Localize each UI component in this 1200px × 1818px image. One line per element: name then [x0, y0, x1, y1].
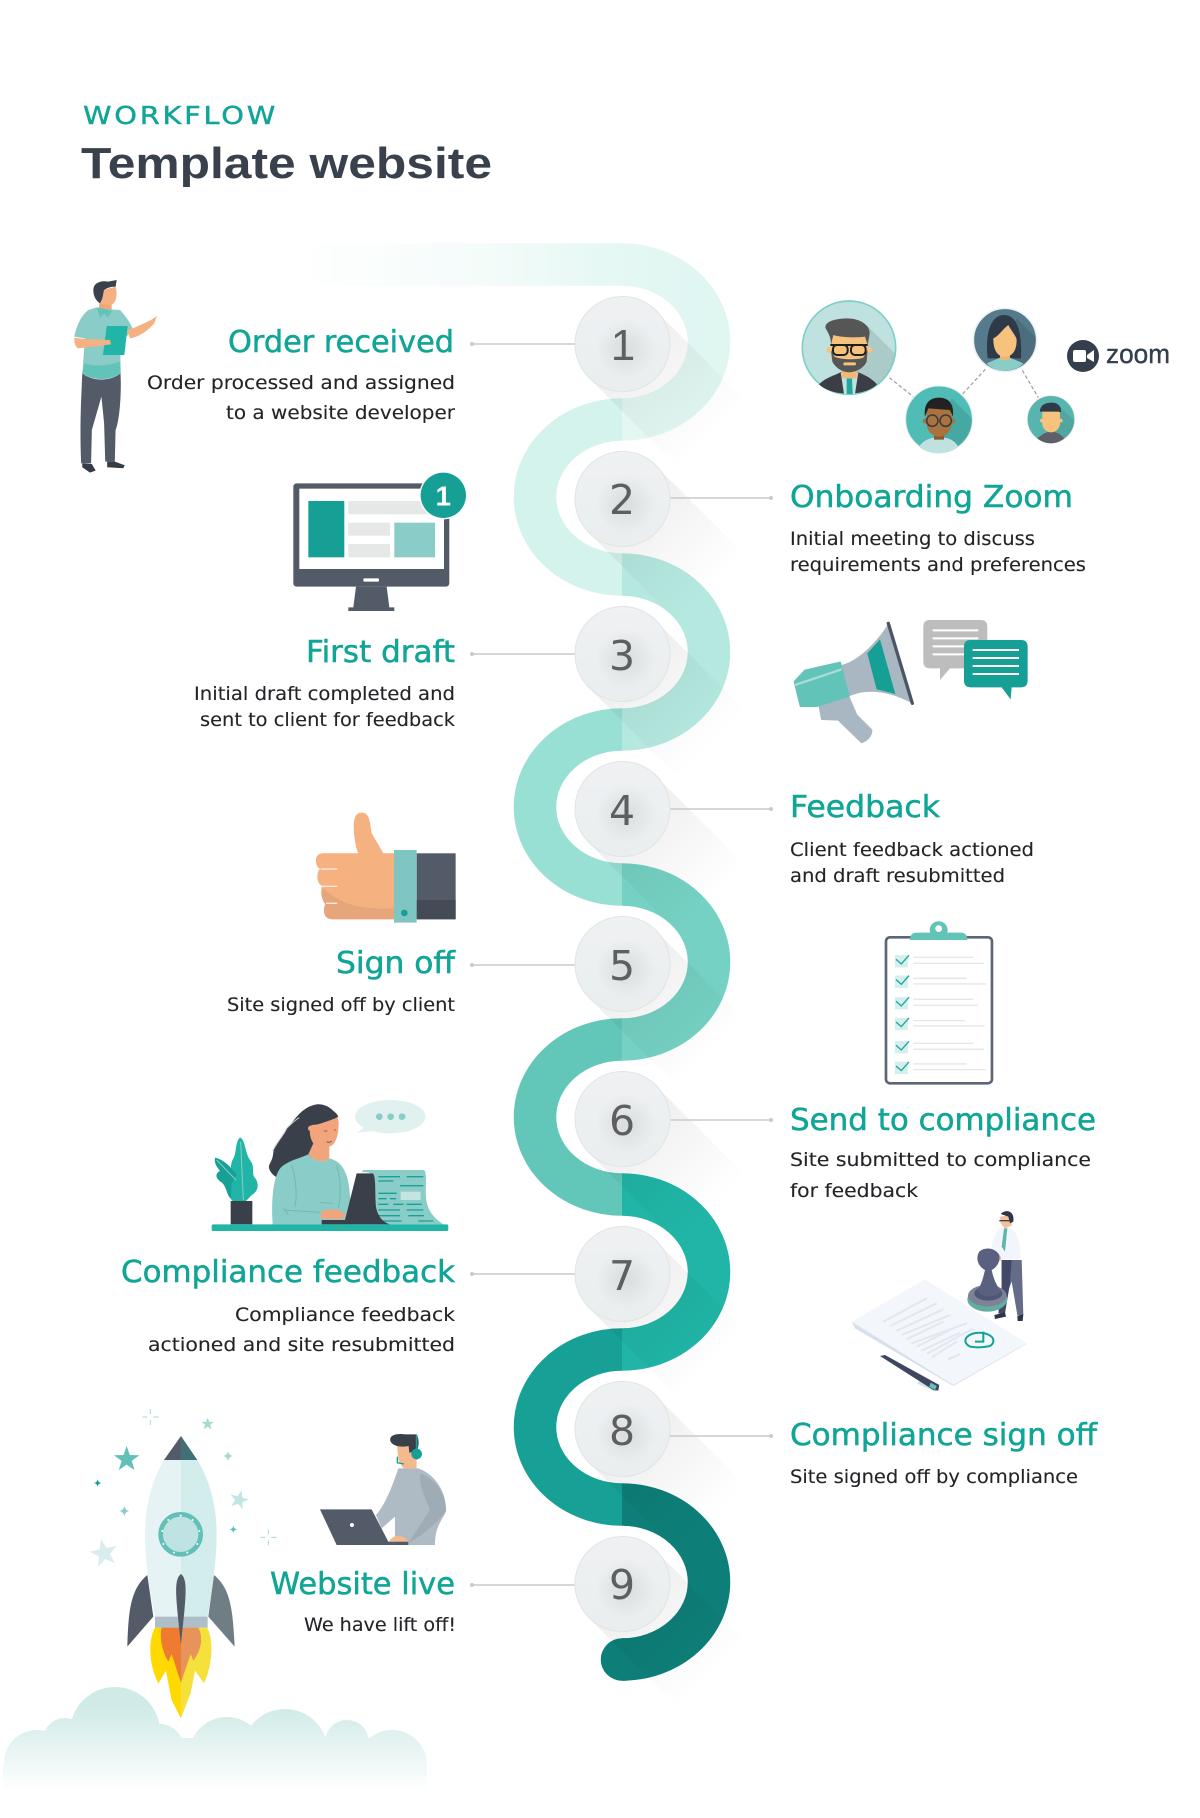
dashed connections — [889, 369, 1038, 398]
disc 7 — [575, 1226, 670, 1322]
step 1 text: Order received: to a website developer — [226, 402, 455, 424]
icon: megaphone and speech bubbles — [795, 620, 1028, 743]
disc 9: 9 — [609, 1561, 635, 1609]
avatar: bearded man — [802, 301, 902, 398]
long shadows behind number discs — [589, 311, 746, 1708]
nose — [164, 1436, 181, 1460]
icon: monitor with notification badge — [293, 471, 467, 611]
icon: video call participants — [802, 301, 1077, 455]
avatar: woman — [973, 308, 1042, 375]
disc 4: 4 — [609, 787, 635, 835]
disc 2 — [575, 452, 670, 546]
icon: clipboard checklist — [886, 921, 992, 1083]
sweater — [272, 1154, 350, 1224]
step 7 text: Compliance feedback: actioned and site resubmitted — [148, 1334, 455, 1356]
disc 5 — [575, 916, 670, 1012]
face — [308, 1116, 339, 1161]
disc 9 — [575, 1536, 670, 1632]
disc 1: 1 — [611, 321, 635, 370]
step 8 text: Compliance sign off: Compliance sign off — [790, 1418, 1098, 1453]
icon: stamp and document — [852, 1211, 1027, 1392]
heading block — [81, 102, 492, 188]
step 4 text: Feedback — [790, 790, 1034, 887]
icon: thumbs up — [316, 813, 456, 923]
step 5 text: Sign off: Site signed off by client — [227, 994, 455, 1016]
eyebrow label: WORKFLOW — [83, 102, 275, 130]
stars — [87, 1409, 277, 1568]
step 2 text: Onboarding Zoom: Initial meeting to discuss — [790, 528, 1035, 550]
number discs — [575, 296, 670, 1632]
stamp — [967, 1287, 1007, 1312]
stamp man — [998, 1260, 1023, 1315]
step 6 text: Send to compliance: Site submitted to compliance — [790, 1149, 1091, 1171]
disc 7: 7 — [609, 1252, 635, 1300]
logo: zoom — [1067, 339, 1170, 372]
approval mark — [965, 1332, 993, 1347]
badge — [419, 471, 467, 519]
step 3 text: First draft: Initial draft completed and — [194, 683, 455, 705]
hair — [269, 1104, 339, 1178]
icon: rocket with stars — [87, 1409, 277, 1718]
paper — [362, 1170, 443, 1224]
step 2 text: Onboarding Zoom: requirements and preferences — [790, 554, 1086, 576]
step 4 text: Feedback: and draft resubmitted — [790, 865, 1005, 887]
step 1 text: Order received: Order processed and assigned — [147, 372, 455, 394]
disc 3 — [575, 606, 670, 702]
fins — [127, 1575, 153, 1647]
disc 8 — [575, 1382, 670, 1476]
speech bubble — [355, 1100, 426, 1133]
step 8 text: Compliance sign off: Site signed off by compliance — [790, 1466, 1078, 1488]
checklist rows — [895, 955, 908, 1074]
step 9 text: Website live: Website live — [270, 1567, 455, 1602]
flames — [150, 1628, 211, 1718]
badge: 1 — [436, 480, 451, 511]
winding ribbon path — [290, 264, 709, 1660]
step 6 text: Send to compliance: Send to compliance — [790, 1103, 1096, 1138]
laptop — [322, 1173, 390, 1224]
step 4 text: Feedback: Client feedback actioned — [790, 839, 1034, 861]
logo: zoom: zoom — [1106, 339, 1170, 369]
step 6 text: Send to compliance — [790, 1103, 1096, 1202]
icon: man presenting with tablet — [74, 280, 157, 473]
plant — [227, 1138, 258, 1201]
porthole — [161, 1514, 201, 1554]
disc 1 — [575, 296, 670, 392]
disc 2: 2 — [609, 476, 635, 524]
step 1 text: Order received: Order received — [228, 325, 454, 360]
title: Template website — [81, 139, 492, 188]
step 5 text: Sign off — [227, 946, 456, 1016]
avatar: young man — [1027, 396, 1077, 445]
step 7 text: Compliance feedback — [121, 1255, 456, 1356]
step 3 text: First draft — [194, 635, 455, 731]
body — [145, 1460, 181, 1617]
icon: cloud — [3, 1687, 427, 1800]
step 1 text: Order received — [147, 325, 455, 424]
step 9 text: Website live: We have lift off! — [304, 1614, 456, 1636]
pen — [880, 1355, 939, 1392]
step 9 text: Website live — [270, 1567, 456, 1636]
step 2 text: Onboarding Zoom — [790, 480, 1086, 576]
step 7 text: Compliance feedback: Compliance feedback — [235, 1304, 455, 1326]
disc 8: 8 — [609, 1407, 635, 1455]
disc 6 — [575, 1072, 670, 1166]
disc 6: 6 — [609, 1097, 635, 1145]
step 7 text: Compliance feedback: Compliance feedback — [121, 1255, 456, 1290]
step 2 text: Onboarding Zoom: Onboarding Zoom — [790, 480, 1073, 515]
disc 5: 5 — [609, 942, 635, 990]
step 3 text: First draft: First draft — [306, 635, 455, 670]
step 4 text: Feedback: Feedback — [790, 790, 941, 825]
icon: support person on laptop — [320, 1434, 446, 1545]
desk — [212, 1224, 448, 1231]
step 6 text: Send to compliance: for feedback — [790, 1180, 918, 1202]
step 8 text: Compliance sign off — [790, 1418, 1098, 1488]
disc 3: 3 — [609, 632, 635, 680]
step 3 text: First draft: sent to client for feedback — [200, 709, 455, 731]
icon: woman typing at desk — [212, 1100, 448, 1231]
hand — [321, 1209, 345, 1219]
connector lines — [470, 342, 773, 1587]
avatar: man with glasses — [906, 386, 975, 455]
step 5 text: Sign off: Sign off — [336, 946, 456, 981]
disc 4 — [575, 762, 670, 856]
